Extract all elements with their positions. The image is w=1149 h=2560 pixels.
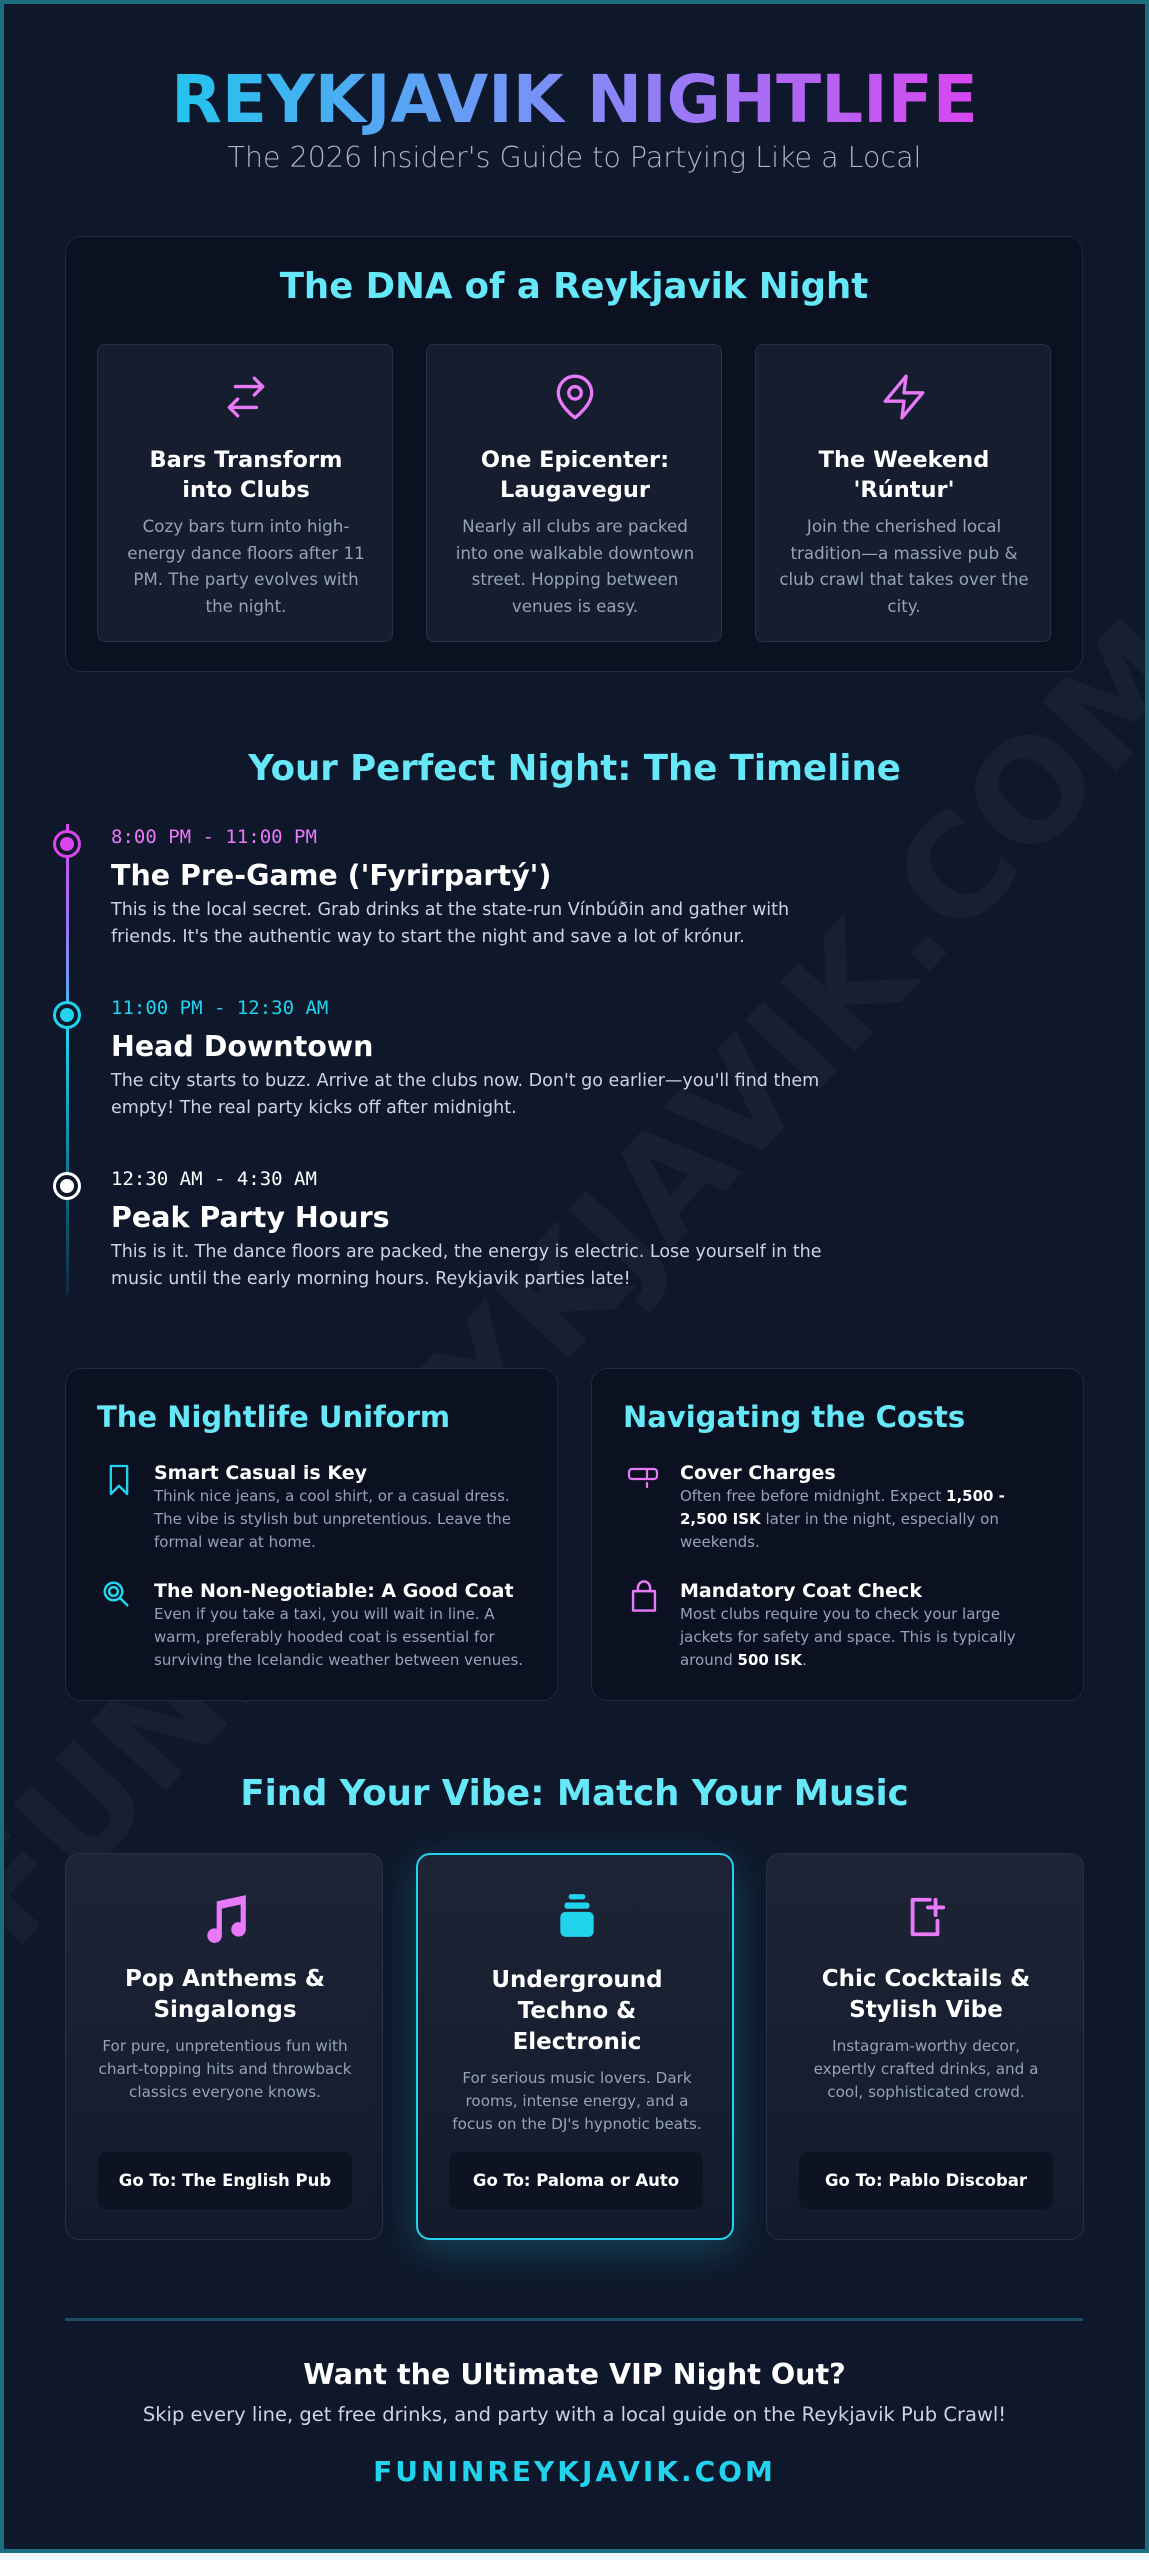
icon: arrows (228, 376, 264, 418)
item: coat: Even if you take a taxi, you will wait in line. A warm, preferably hooded coat is essential for surviving the Icelandic weather between venues. (154, 1605, 523, 1669)
subtitle: The 2026 Insider's Guide to Partying Like a Local (228, 141, 921, 174)
button: pop: Go To: The English Pub (119, 2171, 331, 2190)
step 3: Peak Party Hours (111, 1201, 390, 1234)
step 1: This is the local secret. Grab drinks at the state-run Vínbúðin and gather with friends. It's the authentic way to start the night and save a lot of krónur. (111, 900, 789, 947)
card: cocktails (766, 1853, 1084, 2240)
panel: DNA (65, 236, 1083, 672)
card: epicenter (426, 344, 722, 642)
step 1 (110, 826, 789, 947)
text: epicenter: One Epicenter: (481, 447, 669, 473)
dot 1 (53, 830, 81, 858)
text: techno: Underground (491, 1967, 663, 1993)
item: cover: Cover Charges (680, 1462, 836, 1484)
text: techno: For serious music lovers. Dark rooms, intense energy, and a focus on the DJ's hypnotic beats. (452, 2069, 702, 2133)
item: smart casual (110, 1462, 511, 1551)
icon: music note (207, 1895, 246, 1943)
text: cocktails: Instagram-worthy decor, expertly crafted drinks, and a cool, sophisticated crowd. (814, 2037, 1038, 2101)
text: bars: into Clubs (182, 477, 310, 503)
brand URL: FUNINREYKJAVIK.COM (373, 2455, 776, 2488)
timeline (53, 824, 822, 1295)
text: runtur: 'Rúntur' (853, 477, 954, 503)
icon: bookmark (110, 1464, 128, 1496)
step 1: The Pre-Game ('Fyrirpartý') (111, 859, 551, 892)
text: epicenter: Nearly all clubs are packed into one walkable downtown street. Hopping between venues is easy. (456, 516, 694, 616)
dot 2 (53, 1001, 81, 1029)
item: coat check: Most clubs require you to check your large jackets for safety and space. This is typically around 500 ISK. (680, 1605, 1016, 1669)
item: coat: The Non-Negotiable: A Good Coat (154, 1580, 514, 1602)
text: cocktails (814, 1966, 1038, 2101)
button: cocktails (799, 2152, 1053, 2209)
button: techno: Go To: Paloma or Auto (473, 2171, 679, 2190)
card: runtur (755, 344, 1051, 642)
panel: uniform (65, 1368, 558, 1701)
icon: search (104, 1582, 129, 1607)
step 2 (110, 997, 819, 1118)
step 3: This is it. The dance floors are packed, the energy is electric. Lose yourself in the music until the early morning hours. Reykjavik parties late! (111, 1242, 822, 1289)
icon: bolt (884, 374, 924, 420)
button: techno (449, 2152, 703, 2209)
item: coat check (632, 1580, 1016, 1669)
item: cover: Often free before midnight. Expect 1,500 - 2,500 ISK later in the night, especially on weekends. (680, 1487, 1005, 1551)
heading: timeline: Your Perfect Night: The Timeline (248, 748, 901, 789)
text: techno: Electronic (513, 2029, 641, 2055)
button: cocktails: Go To: Pablo Discobar (825, 2171, 1027, 2190)
icon: cocktail card (910, 1898, 946, 1936)
CTA text: Skip every line, get free drinks, and party with a local guide on the Reykjavik Pub Crawl! (143, 2403, 1006, 2426)
icon: ticket (628, 1468, 658, 1488)
dot 3 (53, 1172, 81, 1200)
step 3 (110, 1168, 822, 1289)
item: coat (104, 1580, 523, 1669)
title: REYKJAVIK NIGHTLIFE (171, 61, 978, 138)
timeline line (66, 824, 69, 1295)
card: pop (65, 1853, 383, 2240)
text: pop (98, 1966, 352, 2101)
step 2: 11:00 PM - 12:30 AM (111, 997, 328, 1019)
item: coat check: Mandatory Coat Check (680, 1580, 922, 1602)
icon: bag (632, 1580, 656, 1612)
card: techno (416, 1853, 734, 2240)
CTA heading: Want the Ultimate VIP Night Out? (303, 2357, 846, 2391)
text: bars: Cozy bars turn into high-energy dance floors after 11 PM. The party evolves with the night. (127, 516, 365, 616)
step 3: 12:30 AM - 4:30 AM (111, 1168, 317, 1190)
text: runtur: Join the cherished local tradition—a massive pub & club crawl that takes over the city. (779, 516, 1029, 616)
step 1: 8:00 PM - 11:00 PM (111, 826, 317, 848)
text: runtur (779, 447, 1029, 616)
heading: costs: Navigating the Costs (623, 1400, 965, 1434)
text: techno (452, 1967, 702, 2133)
text: bars (127, 447, 365, 616)
text: bars: Bars Transform (149, 447, 342, 473)
text: runtur: The Weekend (819, 447, 989, 473)
text: pop: For pure, unpretentious fun with chart-topping hits and throwback classics everyone knows. (98, 2037, 352, 2101)
item: smart casual: Think nice jeans, a cool shirt, or a casual dress. The vibe is stylish but unpretentious. Leave the formal wear at home. (154, 1487, 511, 1551)
item: cover (628, 1462, 1005, 1551)
text: techno: Techno & (518, 1998, 636, 2024)
step 2: The city starts to buzz. Arrive at the clubs now. Don't go earlier—you'll find them empty! The real party kicks off after midnight. (111, 1071, 819, 1118)
text: epicenter (456, 447, 694, 616)
button: pop (98, 2152, 352, 2209)
icon: stack (560, 1894, 594, 1937)
heading: vibe: Find Your Vibe: Match Your Music (240, 1773, 909, 1814)
text: cocktails: Chic Cocktails & (822, 1966, 1030, 1992)
text: epicenter: Laugavegur (500, 477, 650, 503)
text: pop: Singalongs (153, 1997, 297, 2023)
icon: pin (556, 374, 594, 420)
panel: costs (591, 1368, 1084, 1701)
heading: uniform: The Nightlife Uniform (97, 1400, 450, 1434)
text: cocktails: Stylish Vibe (849, 1997, 1003, 2023)
step 2: Head Downtown (111, 1030, 373, 1063)
text: pop: Pop Anthems & (125, 1966, 325, 1992)
item: smart casual: Smart Casual is Key (154, 1462, 367, 1484)
heading: DNA: The DNA of a Reykjavik Night (280, 266, 868, 307)
card: bars transform (97, 344, 393, 642)
